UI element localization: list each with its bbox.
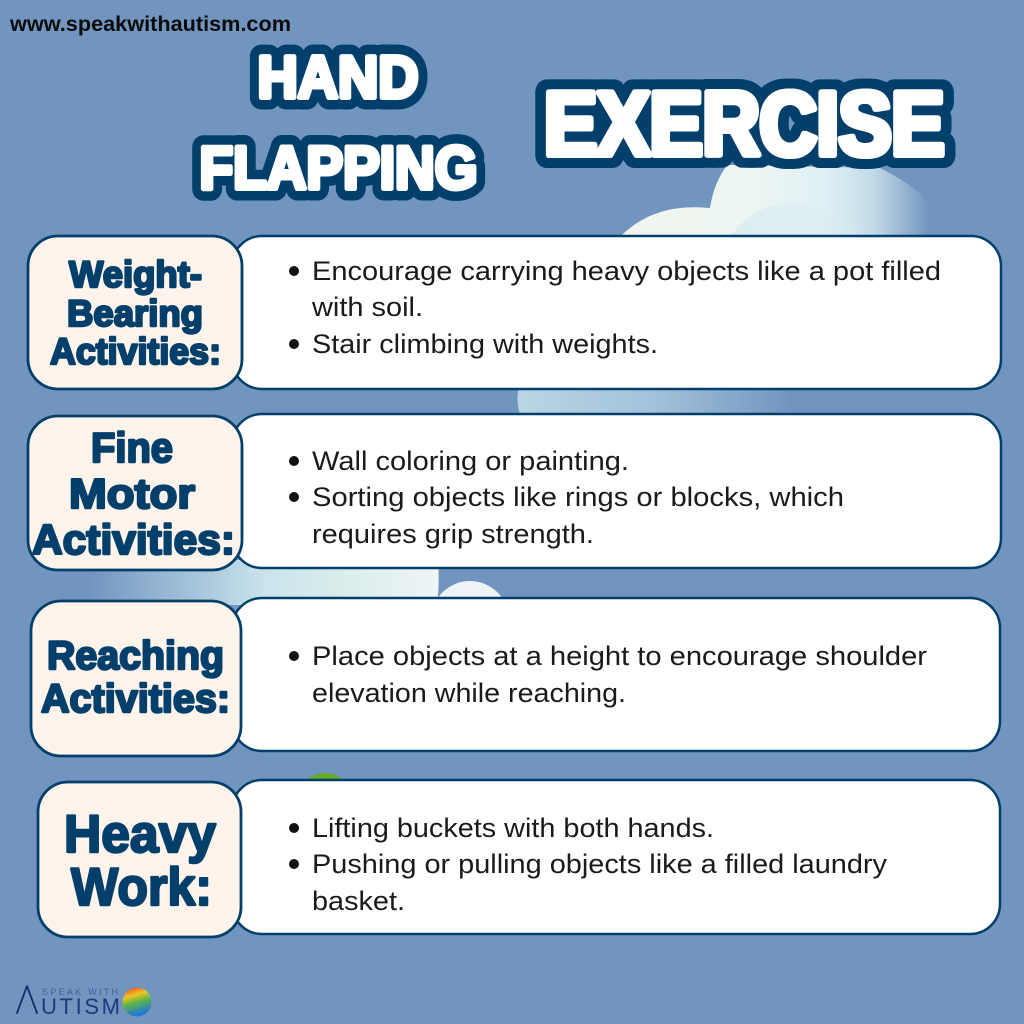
- green shape behind card: [298, 773, 352, 827]
- panel: fine motor activities: requires grip strength.: [312, 519, 594, 549]
- panel: heavy work: [38, 780, 1000, 937]
- panel: fine motor activities: Fine: [91, 424, 173, 471]
- panel: weight-bearing activities: with soil.: [311, 292, 423, 322]
- logo: speak with autism: SPEAK WITH: [42, 987, 118, 997]
- title: hand flapping: [200, 44, 478, 202]
- title: hand flapping: HAND: [258, 44, 418, 110]
- title: hand flapping: FLAPPING: [200, 134, 478, 202]
- cloud: upper right: [517, 165, 935, 418]
- panel: fine motor activities: Motor: [69, 470, 195, 517]
- title: exercise: EXERCISE: [543, 74, 943, 175]
- website url: www.speakwithautism.com: [9, 13, 291, 36]
- panel: fine motor activities: [28, 414, 1001, 570]
- panel: heavy work: Heavy: [64, 805, 217, 864]
- title: exercise: EXERCISE: [545, 74, 945, 175]
- panel: reaching activities: Reaching: [47, 634, 224, 678]
- panel: weight-bearing activities: Stair climbing with weights.: [312, 329, 658, 359]
- title: exercise: EXERCISE: [541, 74, 941, 175]
- panel: heavy work: Lifting buckets with both hands.: [312, 813, 714, 843]
- panel: reaching activities: elevation while reaching.: [312, 678, 626, 708]
- cloud: middle left: [90, 560, 509, 659]
- panel: heavy work: basket.: [312, 886, 405, 916]
- panel: weight-bearing activities: Bearing: [67, 293, 203, 334]
- title: hand flapping: HAND: [258, 44, 418, 110]
- panel: reaching activities: [31, 598, 1000, 756]
- panel: weight-bearing activities: Weight-: [69, 254, 202, 295]
- logo: speak with autism: [17, 986, 152, 1019]
- panel: weight-bearing activities: Activities:: [50, 331, 221, 372]
- panel: reaching activities: Place objects at a height to encourage shoulder: [312, 641, 927, 671]
- panel: heavy work: Pushing or pulling objects like a filled laundry: [312, 849, 888, 879]
- panel: weight-bearing activities: Encourage carrying heavy objects like a pot filled: [312, 256, 941, 286]
- panel: fine motor activities: Sorting objects like rings or blocks, which: [312, 482, 844, 512]
- title: hand flapping: FLAPPING: [200, 134, 478, 202]
- panel: fine motor activities: Wall coloring or painting.: [312, 446, 629, 476]
- panel: fine motor activities: Activities:: [32, 516, 235, 563]
- panel: reaching activities: Activities:: [41, 677, 230, 721]
- panel: weight-bearing activities: [28, 236, 1001, 389]
- logo: speak with autism: UTISM: [41, 994, 120, 1019]
- title: exercise: EXERCISE: [547, 74, 947, 175]
- panel: heavy work: Work:: [71, 858, 212, 917]
